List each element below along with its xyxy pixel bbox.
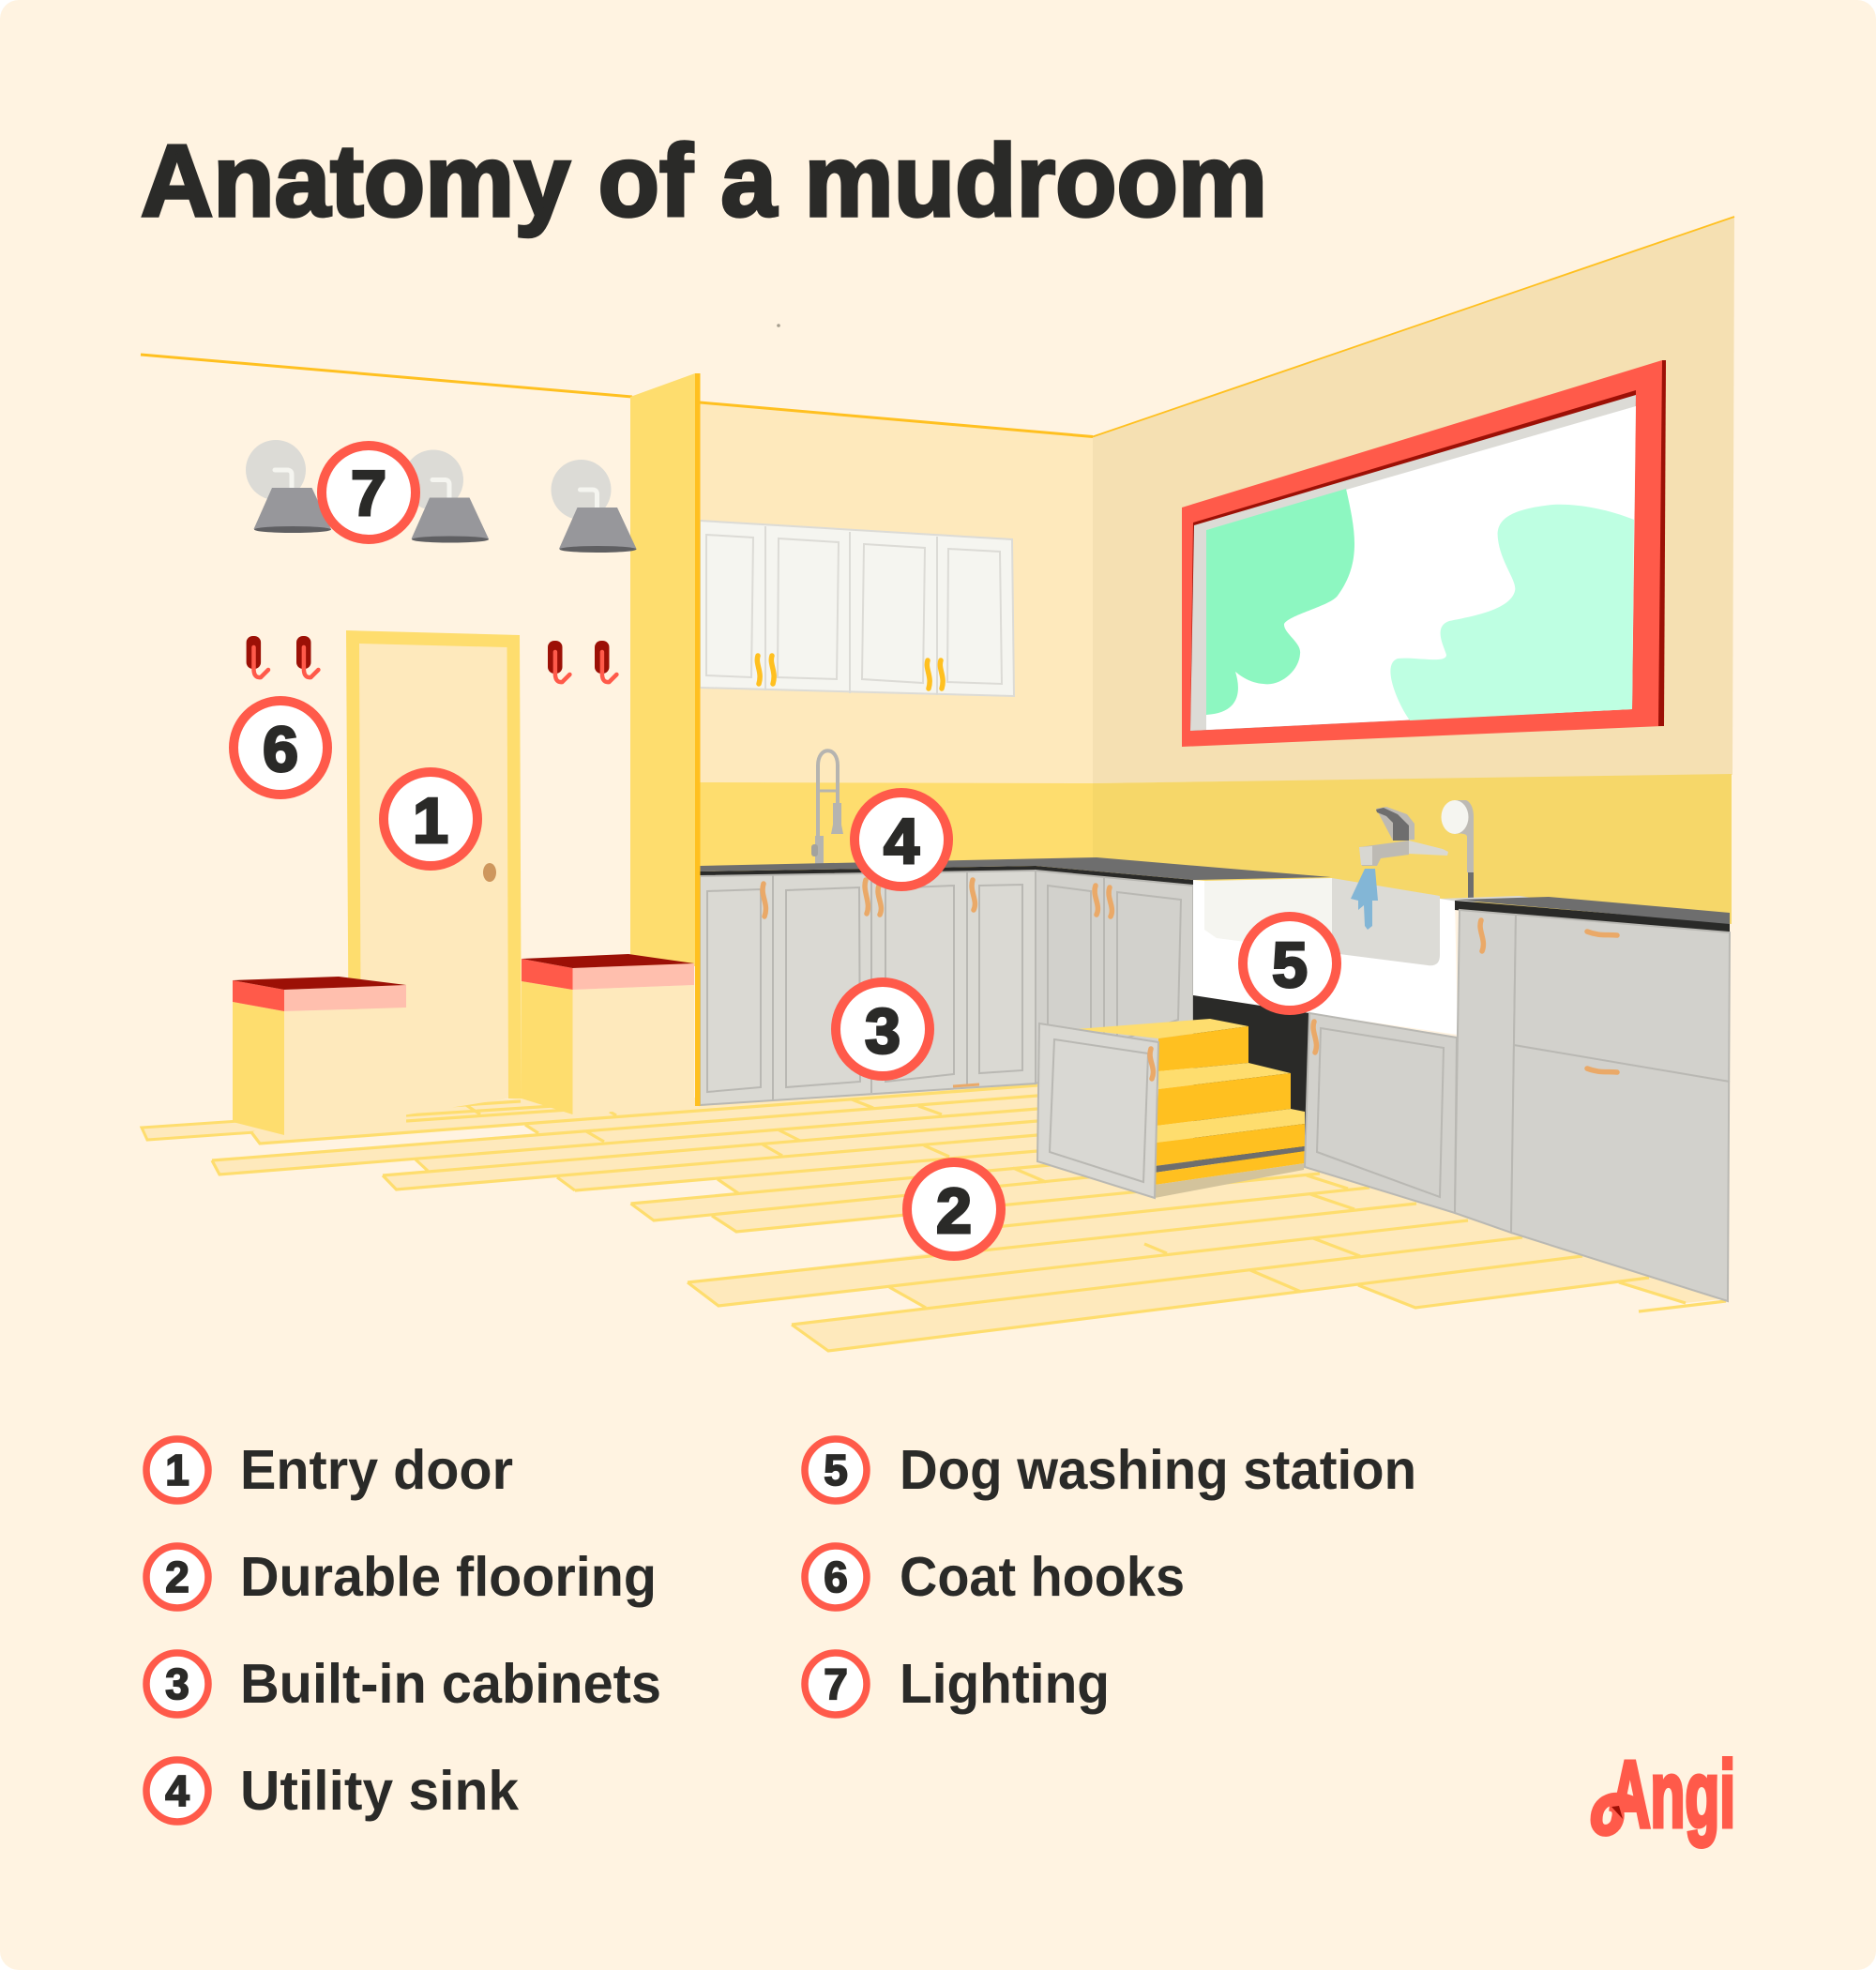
legend item 2: Durable flooring: [240, 1546, 657, 1608]
countertop left: [700, 857, 1331, 886]
illustration: mudroom scene: [141, 217, 1734, 1351]
legend item 6: Coat hooks: [900, 1546, 1185, 1608]
sink apron: [1193, 880, 1458, 1035]
right wall: [1093, 217, 1734, 783]
sink right inner face: [1332, 878, 1440, 965]
right base cabinets: [1455, 910, 1730, 1301]
marker 1: 1: [413, 785, 448, 856]
legend item 1: 1: [165, 1446, 189, 1494]
legend item 7: [805, 1653, 1110, 1715]
title: Anatomy of a mudroom: [141, 124, 1267, 238]
built-in cabinets: [700, 871, 1193, 1105]
marker 3: [836, 982, 930, 1076]
marker 2: 2: [936, 1175, 972, 1247]
marker 4: [855, 793, 948, 886]
faucet: [1359, 807, 1448, 866]
legend item 3: 3: [165, 1659, 189, 1708]
logo: Angi: Angi: [1610, 1742, 1735, 1847]
coat hook 1: [247, 636, 268, 677]
marker 3: 3: [865, 995, 900, 1067]
legend item 4: 4: [165, 1766, 189, 1815]
legend item 4: Utility sink: [240, 1760, 519, 1822]
legend: [146, 1439, 1416, 1822]
window: [1182, 360, 1666, 747]
legend item 7: Lighting: [900, 1653, 1110, 1715]
coat hook 3: [548, 641, 569, 682]
countertop right: [1440, 896, 1730, 932]
marker 2: [907, 1162, 1001, 1256]
speck: [777, 324, 780, 327]
upper cabinets: [700, 521, 1014, 696]
logo: Angi: [1596, 1742, 1735, 1847]
right backsplash: [1093, 774, 1732, 924]
steps: [1076, 1019, 1305, 1198]
left backsplash: [700, 782, 1097, 877]
coat hook 4: [595, 641, 616, 682]
legend item 6: 6: [824, 1553, 848, 1601]
pillar: [630, 373, 700, 1106]
right bench: [522, 954, 694, 1114]
window scenery: green tree: [1206, 489, 1354, 715]
marker 5: 5: [1272, 930, 1308, 1001]
marker 7: 7: [351, 458, 386, 529]
marker 6: [234, 701, 327, 795]
marker 6: 6: [263, 714, 298, 785]
marker 4: 4: [884, 806, 919, 877]
left back wall: [700, 402, 1093, 783]
sink left inner face: [1204, 878, 1332, 953]
door knob: [483, 863, 496, 882]
lamp 3: [552, 460, 636, 553]
marker 7: [322, 446, 416, 539]
cabinet door under sink: [1305, 1013, 1457, 1213]
utility sink faucet: [811, 750, 843, 864]
water: [1351, 869, 1378, 930]
left bench: [233, 977, 406, 1135]
lamp 1: [246, 440, 331, 533]
sprayer: [1441, 800, 1474, 898]
open cabinet door: [1037, 1023, 1158, 1198]
ceiling lines: [141, 355, 1093, 437]
floor planks: [142, 1079, 1728, 1351]
legend item 5: 5: [824, 1446, 848, 1494]
legend item 7: 7: [824, 1659, 848, 1708]
dog washing station: [1037, 800, 1474, 1213]
legend item 5: Dog washing station: [900, 1439, 1416, 1501]
legend item 1: Entry door: [240, 1439, 513, 1501]
legend item 2: 2: [165, 1553, 189, 1601]
coat hook 2: [296, 636, 318, 677]
marker 1: [384, 772, 477, 866]
lamp 2: [403, 450, 489, 542]
marker 5: [1243, 917, 1337, 1010]
legend item 3: Built-in cabinets: [240, 1653, 661, 1715]
entry door: [346, 630, 522, 1122]
dark cavity: [1193, 995, 1309, 1163]
window scenery: pale tree: [1390, 505, 1634, 720]
